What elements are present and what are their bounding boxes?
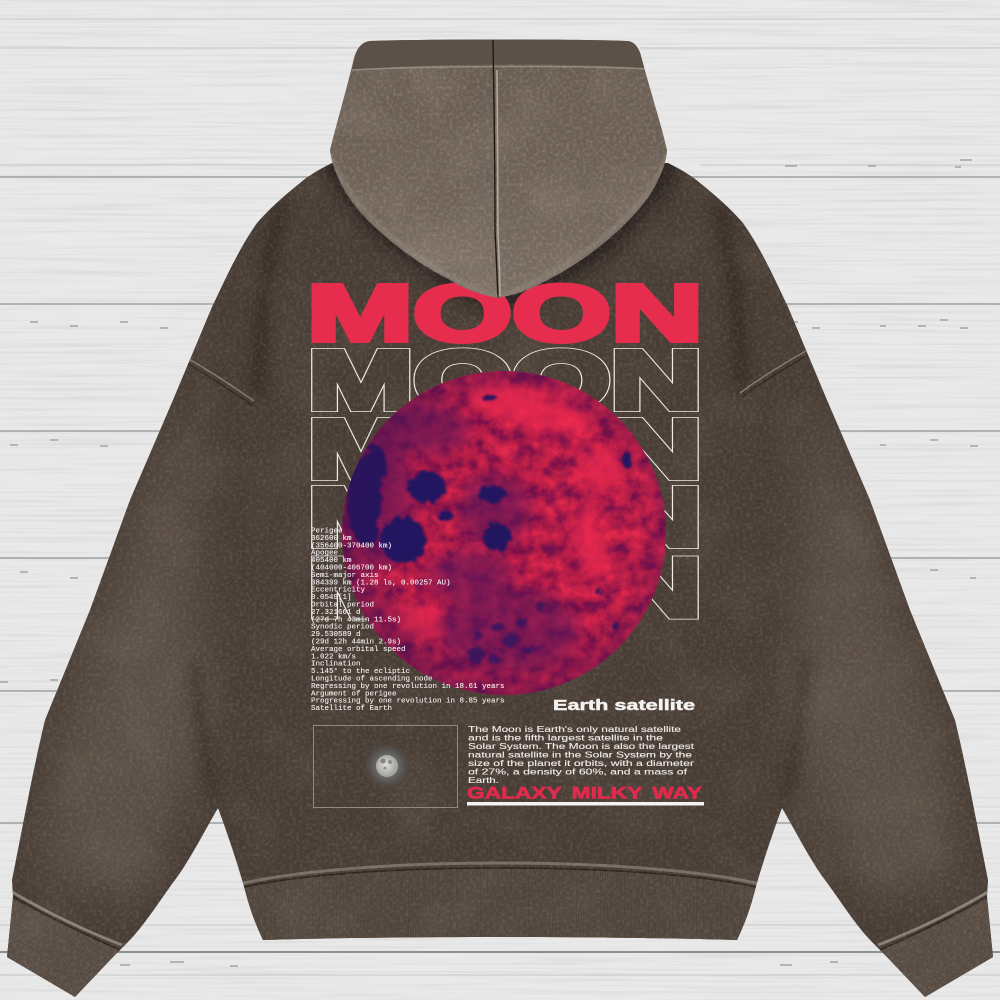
orbital data text block: Longitude of ascending node: [311, 676, 433, 684]
description paragraph: of 27%, a density of 60%, and a mass of: [468, 766, 688, 776]
orbital data text block: Orbital period: [311, 602, 374, 610]
orbital data text block: Average orbital speed: [311, 646, 406, 654]
orbital data text block: Inclination: [311, 661, 361, 669]
lighter sleeve wash: [44, 449, 956, 894]
orbital data text block: (404000-406700 km): [311, 564, 392, 572]
outlined MOON row 1: [308, 334, 702, 426]
orbital data text block: 384399 km (1.28 ls, 0.00257 AU): [311, 579, 451, 587]
title: MOON: MOON: [307, 268, 703, 358]
outlined MOON row 1: MOON: [308, 334, 702, 426]
dusky shading: [346, 404, 580, 672]
right cuff ribbing: [878, 892, 1000, 1000]
description paragraph: natural satellite in the Solar System by the: [468, 750, 692, 760]
orbital data text block: Progressing by one revolution in 8.85 years: [311, 698, 505, 706]
waist hem ribbing: [240, 863, 760, 945]
outlined MOON row 4: MOON: [308, 541, 702, 634]
outlined MOON row 4: MOON: [308, 541, 702, 634]
moon illustration: [340, 370, 670, 700]
orbital data text block: 362600 km: [311, 535, 352, 543]
hood: [330, 40, 667, 298]
orbital data text block: 0.0549[1]: [311, 594, 352, 602]
orbital data text block: Argument of perigee: [311, 690, 397, 698]
icon: small moon: [376, 755, 398, 777]
orbital data text block: (356400-370400 km): [311, 542, 392, 550]
outlined MOON row 1: MOON: [308, 334, 702, 426]
orbital data text block: 1.022 km/s: [311, 653, 356, 661]
orbital data text block: Eccentricity: [311, 587, 366, 595]
outlined MOON row 3: MOON: [308, 470, 702, 564]
orbital data text block: Perigee: [311, 528, 343, 536]
orbital data text block: Synodic period: [311, 624, 374, 632]
description paragraph: [468, 724, 695, 785]
orbital data text block: 405400 km: [311, 557, 352, 565]
outlined MOON row 3: MOON: [308, 470, 702, 564]
outlined MOON row 2: MOON: [308, 402, 702, 496]
description paragraph: and is the fifth largest satellite in the: [468, 732, 663, 742]
framed small moon picture: [314, 726, 458, 808]
orbital data text block: Regressing by one revolution in 18.61 years: [311, 683, 505, 691]
description paragraph: size of the planet it orbits, with a diameter: [468, 758, 694, 768]
orbital data text block: (29d 12h 44min 2.9s): [311, 638, 401, 646]
outlined MOON row 4: [308, 541, 702, 634]
orbital data text block: Semi-major axis: [311, 572, 379, 580]
orbital data text block: 5.145° to the ecliptic: [311, 667, 410, 676]
orbital data text block: Satellite of Earth: [311, 705, 392, 713]
outlined MOON row 2: [308, 402, 702, 496]
orbital data text block: Apogee: [311, 550, 338, 558]
description paragraph: The Moon is Earth's only natural satellite: [468, 724, 681, 734]
left shoulder seam: [185, 358, 254, 405]
hood centre seam: [493, 40, 500, 298]
left cuff ribbing: [0, 892, 122, 1000]
orbital data text block: (27d 7h 43min 11.5s): [311, 616, 401, 624]
orbital data text block: 27.321661 d: [311, 609, 361, 617]
sleeve fold shadows: [195, 205, 805, 808]
outlined MOON row 2: MOON: [308, 402, 702, 496]
hood brim band: [352, 38, 646, 70]
orbital data text block: [311, 528, 505, 713]
right shoulder seam: [740, 351, 808, 397]
hood shadow on body: [320, 160, 680, 312]
white underline bar: [467, 802, 704, 806]
bright highlights: [393, 376, 620, 635]
outlined MOON row 3: [308, 470, 702, 564]
description paragraph: Solar System. The Moon is also the largest: [468, 741, 695, 751]
dark maria: [347, 396, 632, 631]
speckled southern maria: [468, 618, 537, 665]
description paragraph: Earth.: [468, 775, 499, 785]
orbital data text block: 29.530589 d: [311, 631, 361, 639]
outlined repeated MOON rows: [308, 334, 702, 634]
heading: GALAXY MILKY WAY: GALAXY MILKY WAY: [467, 784, 703, 802]
subtitle: Earth satellite: Earth satellite: [553, 698, 695, 714]
